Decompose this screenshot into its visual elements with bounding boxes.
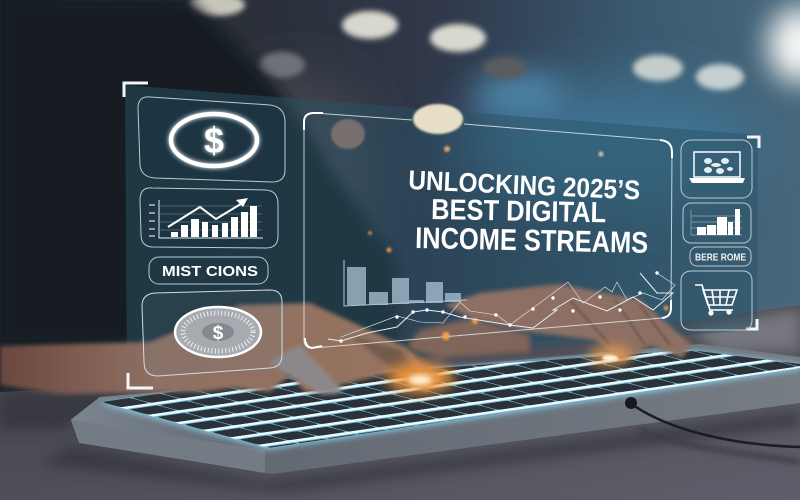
grid lines: [160, 206, 262, 230]
key glow: [100, 350, 800, 450]
label: mist cions: MIST CIONS: [162, 263, 258, 280]
panel: laptop icon: [681, 140, 752, 198]
title: BEST DIGITAL: [431, 194, 606, 229]
bars: [171, 206, 257, 237]
finger gaps: [395, 300, 670, 372]
hands: [0, 284, 692, 395]
title: [408, 165, 648, 260]
small sparks: [368, 146, 668, 340]
corner brackets: [124, 83, 759, 388]
icon: detailed coin: $: [213, 323, 224, 344]
title: UNLOCKING 2025’S: [408, 165, 641, 206]
main title frame: [304, 113, 672, 348]
label: bere rome: BERE ROME: [695, 252, 746, 264]
bar chart: [344, 260, 467, 306]
table: [0, 305, 800, 500]
panel: small bar chart: [683, 203, 751, 243]
person silhouette: [0, 0, 400, 345]
data points: [339, 271, 659, 343]
title: INCOME STREAMS: [415, 222, 648, 260]
label: bere rome: [690, 247, 751, 266]
cable: [625, 397, 800, 462]
right hand: [445, 284, 692, 362]
keyboard: [40, 345, 800, 492]
panel: coin: [142, 290, 282, 376]
left arm and hand: [0, 303, 442, 394]
middle hand: [405, 318, 530, 358]
pink bokeh: [331, 119, 365, 149]
keyboard glow highlights: [386, 346, 632, 394]
glass panel: [125, 85, 758, 388]
icon: dollar coin: $: [204, 120, 224, 161]
icon: dollar coin: [171, 114, 257, 166]
panel: growth chart: [140, 188, 278, 248]
keyboard shadow: [40, 412, 800, 492]
bokeh light over panel: [413, 104, 463, 134]
line chart: [328, 271, 675, 343]
trend arrow: [168, 202, 244, 227]
label: mist cions: [149, 257, 268, 284]
panel: dollar icon: [138, 97, 285, 182]
axis labels: [149, 205, 155, 236]
icon: cart: [695, 285, 737, 315]
left fingers: [268, 345, 345, 395]
keys: [100, 350, 800, 448]
keyboard body: [72, 345, 800, 473]
panel: shopping cart: [681, 271, 752, 330]
